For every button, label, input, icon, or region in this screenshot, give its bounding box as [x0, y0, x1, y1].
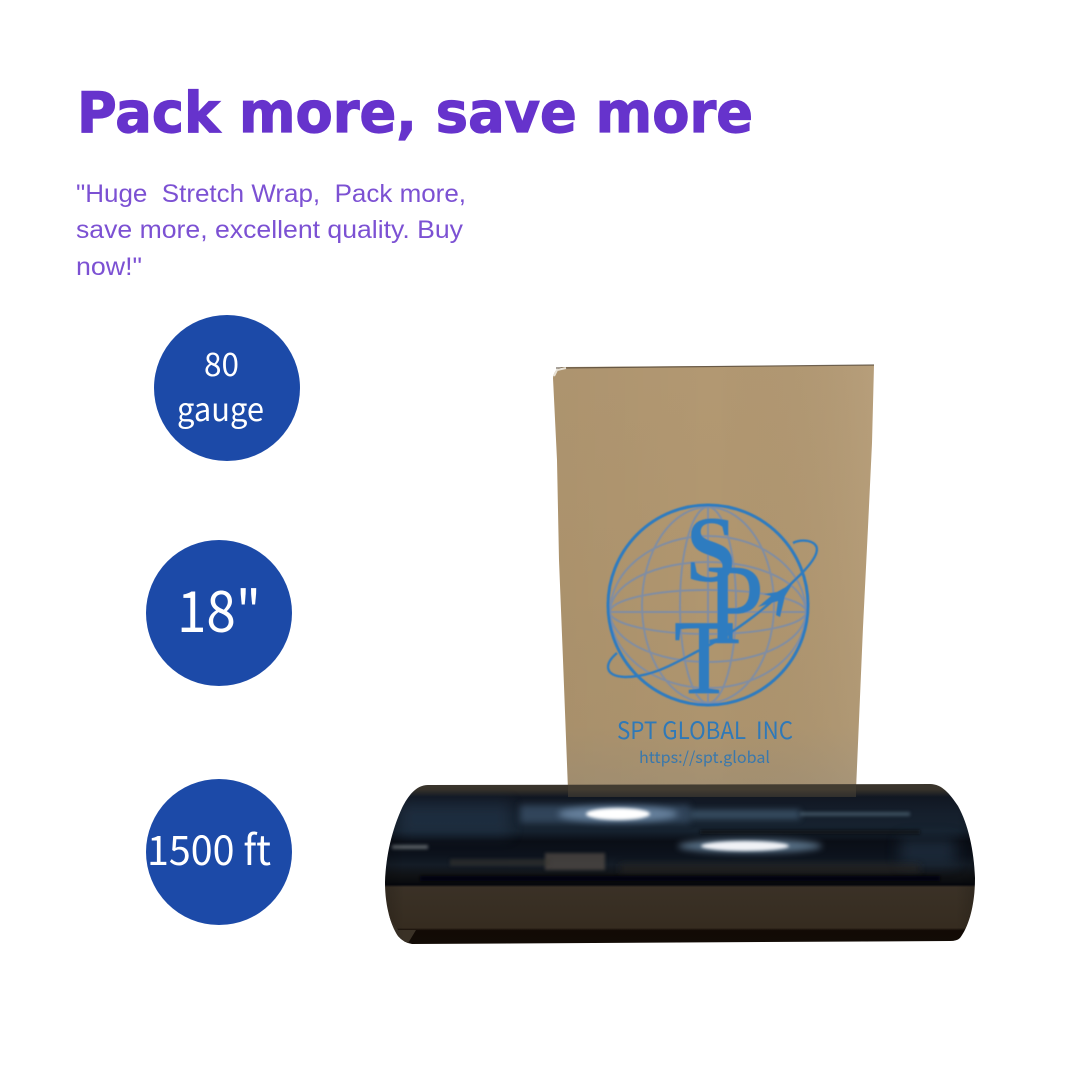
badge: 1500 ft: 1500 ft	[147, 817, 271, 877]
box label: company name: SPT GLOBAL INC	[617, 711, 793, 746]
product photo: cardboard box	[553, 365, 874, 790]
title: Pack more, save more	[77, 81, 753, 146]
roll: brown reflections	[545, 853, 605, 870]
box logo: SPT globe: T	[674, 599, 734, 716]
box logo: SPT globe	[608, 498, 817, 716]
badge: 80 gauge: 80	[204, 340, 239, 386]
box logo: SPT globe: P	[706, 541, 764, 668]
product photo: black stretch wrap roll	[380, 780, 980, 950]
roll: highlights	[558, 806, 678, 822]
subtitle text block: "Huge Stretch Wrap, Pack more,	[76, 180, 466, 208]
badge: 80 gauge: gauge	[177, 385, 264, 431]
infographic canvas	[76, 88, 975, 944]
roll: dark streaks	[420, 876, 940, 881]
badge: 1500 ft	[146, 779, 292, 925]
badge: 18 inch	[146, 540, 292, 686]
box logo: SPT globe: S	[686, 498, 736, 602]
badge: 80 gauge	[154, 315, 300, 461]
box label: web address: https://spt.global	[639, 744, 770, 768]
subtitle text block	[76, 180, 466, 281]
subtitle text block: now!"	[76, 253, 142, 281]
roll: blue sheen	[400, 802, 510, 836]
badge: 18 inch: 18"	[177, 567, 261, 649]
subtitle text block: save more, excellent quality. Buy	[76, 216, 464, 244]
